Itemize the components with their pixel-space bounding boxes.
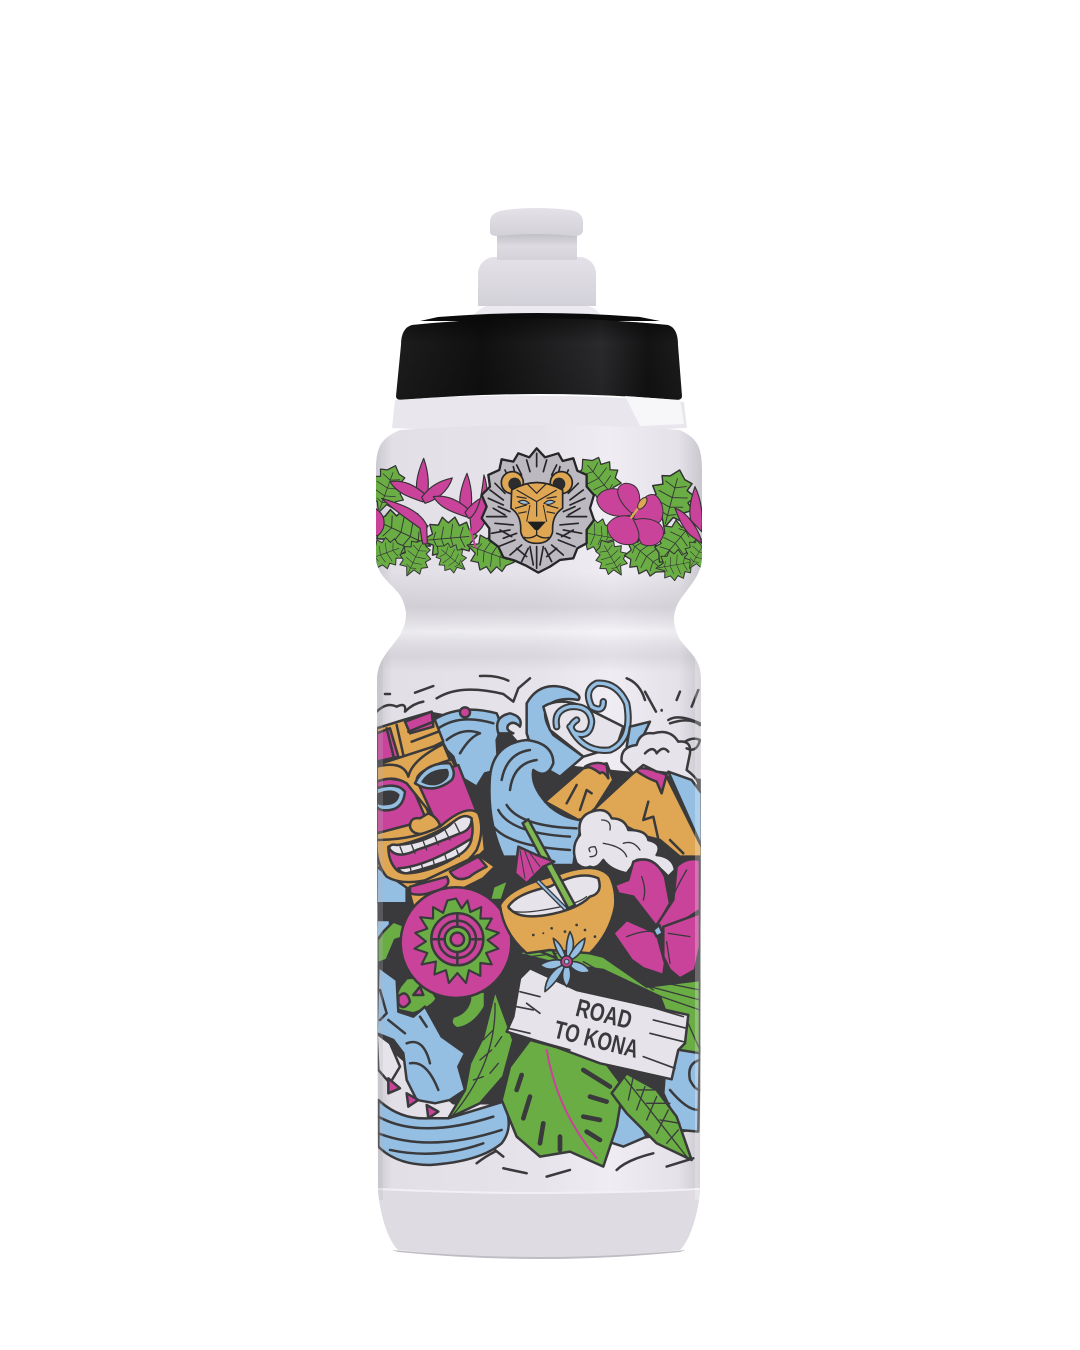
lid ring xyxy=(392,395,687,432)
nozzle collar xyxy=(478,257,596,306)
splashing wave xyxy=(377,967,465,1118)
wood sign xyxy=(507,968,688,1079)
lion nose xyxy=(527,522,546,530)
tiki headdress xyxy=(377,712,443,763)
bottom waves xyxy=(378,1047,700,1165)
right cloud and waves xyxy=(621,720,702,847)
coconut flesh xyxy=(508,876,600,916)
lion face xyxy=(511,482,563,543)
tiki face xyxy=(377,743,485,890)
bottle illustration xyxy=(376,208,702,1259)
volcanoes xyxy=(545,763,702,857)
sign text: ROAD xyxy=(573,994,635,1035)
lion ears xyxy=(501,472,523,494)
bottle body xyxy=(370,395,710,1259)
blue star flower xyxy=(540,932,590,992)
turtle xyxy=(377,880,511,1028)
white curly cloud xyxy=(574,810,675,877)
top floral band xyxy=(376,447,702,582)
lion eyes xyxy=(518,500,529,504)
coconut drink xyxy=(500,819,615,953)
band leaves xyxy=(360,447,720,586)
tiki mouth xyxy=(376,810,481,882)
turtle head xyxy=(398,979,436,1012)
center wave xyxy=(489,740,583,865)
nozzle flange xyxy=(473,305,601,326)
tiki mask xyxy=(376,712,495,907)
tiki nose xyxy=(410,813,440,834)
body shell xyxy=(376,425,702,1258)
base section xyxy=(378,1190,700,1258)
wood sign: TO KONA xyxy=(551,1016,641,1064)
nozzle neck xyxy=(497,232,577,260)
long green leaf xyxy=(448,990,513,1118)
monstera leaf xyxy=(502,1040,623,1167)
coconut dots xyxy=(532,924,596,938)
hibiscus flower xyxy=(597,483,663,546)
waist shading xyxy=(384,586,694,664)
dark backdrop xyxy=(377,713,700,1143)
main illustration xyxy=(376,676,702,1177)
sketch lines background xyxy=(377,676,700,1177)
straws xyxy=(538,882,565,908)
black lid xyxy=(396,313,682,400)
lion mane xyxy=(482,448,594,573)
side edge shading xyxy=(376,640,702,1200)
left blue wave xyxy=(377,707,521,963)
coconut shell xyxy=(500,868,615,953)
turtle flippers xyxy=(378,923,402,963)
striped palm leaf xyxy=(612,1073,692,1160)
nozzle top xyxy=(490,208,583,236)
turtle shell xyxy=(401,887,511,998)
tiki eyes xyxy=(415,763,454,788)
tiki chin xyxy=(408,855,495,907)
palm leaves behind sign xyxy=(517,942,700,1053)
cocktail umbrella xyxy=(515,847,554,883)
nozzle xyxy=(473,208,601,326)
big hibiscus xyxy=(613,859,700,978)
bird of paradise flowers xyxy=(375,458,702,548)
lion head xyxy=(482,448,594,573)
top curling wave xyxy=(527,683,650,777)
